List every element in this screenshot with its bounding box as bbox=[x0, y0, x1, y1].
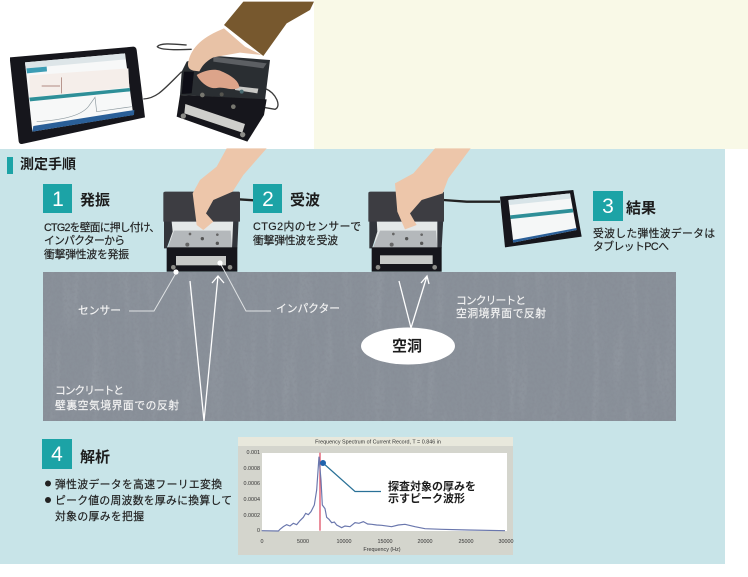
label: sensor with leader line: センサー bbox=[78, 304, 121, 317]
arrow: wave reflected from wall back bbox=[190, 276, 224, 421]
text: reflection at concrete and back air boundary bbox=[55, 384, 179, 412]
step 1 number: 1 bbox=[52, 188, 64, 211]
icon: hand bbox=[188, 28, 262, 71]
step 4 bullet list: 弾性波データを高速フーリエ変換 bbox=[55, 477, 222, 491]
icon: device 1 opening bbox=[170, 222, 233, 248]
label: impactor with leader line: インパクター bbox=[276, 302, 340, 315]
icon: device 1 cable bbox=[238, 196, 254, 204]
icon: jacket sleeve bbox=[224, 2, 314, 56]
step 3 number: 3 bbox=[602, 195, 614, 218]
heading: measurement procedure: 測定手順 bbox=[20, 156, 76, 172]
text: reflection at concrete and cavity boundary: 空洞境界面で反射 bbox=[456, 306, 546, 320]
y axis labels: 0.001 bbox=[246, 450, 260, 456]
peak callout: 示すピーク波形 bbox=[388, 491, 465, 505]
panel: measurement procedure bbox=[0, 149, 725, 564]
step 2 description bbox=[253, 219, 361, 247]
step 3 description: タブレットPCへ bbox=[593, 239, 669, 253]
label: impactor with leader line bbox=[217, 260, 340, 315]
background: cream panel bbox=[314, 0, 748, 149]
concrete wall bbox=[43, 272, 676, 421]
x axis labels: 25000 bbox=[458, 539, 474, 545]
text: reflection at concrete and back air boundary: 壁裏空気境界面での反射 bbox=[55, 398, 179, 412]
photo: tablet and CTG2 held by hand bbox=[10, 2, 314, 144]
icon: device 1 base bbox=[167, 247, 237, 272]
step 4 bullet list bbox=[45, 477, 232, 523]
step 1 number bbox=[43, 184, 72, 213]
x axis labels: 0 bbox=[260, 539, 264, 545]
peak marker line bbox=[318, 453, 322, 531]
icon: small tablet bbox=[500, 190, 582, 247]
spectrum trace bbox=[262, 457, 505, 531]
step 3 description bbox=[593, 226, 715, 253]
y axis labels: 0.0008 bbox=[244, 466, 260, 472]
step 4 number: 4 bbox=[51, 443, 63, 466]
chart frame bbox=[238, 437, 513, 555]
step 4 bullet list: ピーク値の周波数を厚みに換算して bbox=[55, 493, 232, 507]
step 3 description: 受波した弾性波データは bbox=[593, 226, 715, 240]
plot area bbox=[262, 453, 507, 531]
device 2 with hand and tablet bbox=[368, 148, 582, 272]
step 2 number: 2 bbox=[262, 188, 274, 211]
y axis labels: 0.0006 bbox=[244, 481, 260, 487]
x axis labels: 10000 bbox=[336, 539, 352, 545]
icon: CTG2 device bbox=[177, 55, 270, 142]
chart title bar: Frequency Spectrum of Current Record, T = 0.846 in bbox=[315, 440, 441, 446]
step 1 description: インパクターから bbox=[44, 234, 125, 247]
cavity ellipse bbox=[361, 328, 455, 364]
icon: tablet bbox=[10, 47, 145, 144]
text: reflection at concrete and cavity boundary: コンクリートと bbox=[456, 294, 526, 307]
step 4 title: 解析 bbox=[80, 448, 110, 466]
icon: device 1 handle bbox=[163, 192, 240, 222]
x axis labels: 15000 bbox=[378, 539, 392, 545]
icon: device 2 cable bbox=[443, 200, 500, 202]
cavity ellipse: 空洞 bbox=[392, 337, 422, 355]
icon: device 2 plate bbox=[373, 231, 437, 248]
text: reflection at concrete and back air boundary: コンクリートと bbox=[55, 384, 124, 397]
step 1 description: 衝撃弾性波を発振 bbox=[44, 247, 129, 261]
step 3 title: 結果 bbox=[626, 199, 656, 217]
y axis labels: 0.0004 bbox=[244, 497, 260, 503]
peak callout: 探査対象の厚みを bbox=[388, 479, 476, 493]
icon: device 2 side frame bbox=[369, 218, 443, 248]
text: reflection at concrete and cavity boundary bbox=[456, 294, 546, 320]
y axis labels: 0.0002 bbox=[244, 513, 260, 519]
device 1 with hand bbox=[163, 148, 267, 272]
label: sensor with leader line bbox=[78, 269, 179, 317]
step 2 number bbox=[253, 184, 282, 213]
chart: frequency spectrum bbox=[238, 437, 514, 555]
icon: device 2 handle bbox=[368, 192, 444, 222]
step 1 title: 発振 bbox=[80, 191, 110, 209]
icon: device 1 side frame bbox=[164, 218, 239, 248]
icon: device 2 opening bbox=[375, 222, 438, 248]
heading marker bbox=[7, 157, 13, 174]
step 3 number bbox=[593, 191, 623, 221]
peak callout bbox=[320, 460, 476, 505]
x axis labels: 5000 bbox=[297, 539, 309, 545]
chart title bar bbox=[238, 437, 513, 446]
arrow: wave reflected from cavity bbox=[399, 276, 429, 328]
icon: device 1 plate bbox=[168, 231, 232, 248]
x axis labels: 30000 bbox=[498, 539, 514, 545]
step 4 number bbox=[42, 439, 72, 469]
icon: device 2 hand bbox=[395, 148, 471, 229]
x axis labels: 20000 bbox=[418, 539, 432, 545]
icon: fingers bbox=[197, 70, 239, 89]
x axis labels: Frequency (Hz) bbox=[363, 547, 401, 553]
icon: device 1 hand bbox=[193, 148, 267, 230]
step 1 description: CTG2を壁面に押し付け、 bbox=[44, 220, 160, 234]
icon: tablet cable bbox=[143, 44, 278, 109]
step 2 title: 受波 bbox=[290, 191, 320, 209]
y axis labels: 0 bbox=[257, 528, 260, 534]
step 2 description: CTG2内のセンサーで bbox=[253, 219, 361, 233]
spectrum curve bbox=[262, 453, 505, 531]
icon: device 2 base bbox=[372, 247, 442, 272]
y axis labels bbox=[244, 450, 260, 534]
step 4 bullet list: 対象の厚みを把握 bbox=[55, 509, 144, 523]
step 2 description: 衝撃弾性波を受波 bbox=[253, 233, 338, 247]
step 1 description bbox=[44, 220, 160, 261]
x axis labels bbox=[260, 539, 514, 553]
